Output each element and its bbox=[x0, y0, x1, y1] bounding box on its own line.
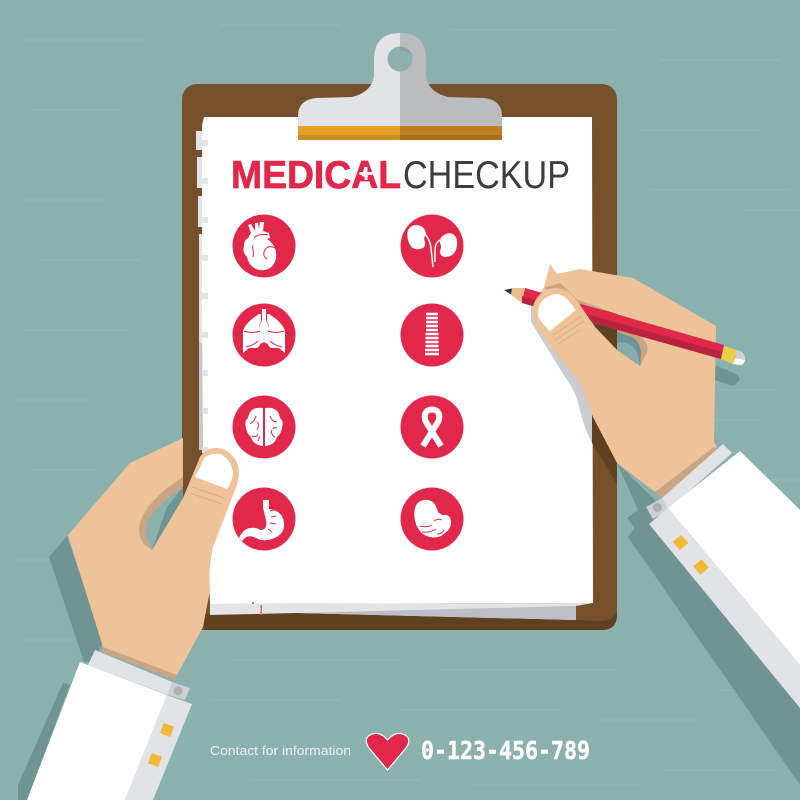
contact label: Contact for information bbox=[210, 743, 351, 758]
icon: heart organ bbox=[232, 214, 296, 278]
icon: stomach bbox=[232, 488, 296, 550]
left sleeve bbox=[27, 650, 192, 800]
finger gap bbox=[544, 283, 648, 366]
shadow: right arm bbox=[617, 463, 800, 785]
thumb nail bbox=[538, 294, 576, 331]
thumb nail bbox=[195, 454, 233, 489]
thumb bbox=[532, 288, 640, 410]
title: MEDICAL bbox=[231, 154, 401, 197]
icon: ribbon bbox=[400, 396, 464, 458]
icon: lungs bbox=[232, 304, 296, 366]
icon: kidneys bbox=[400, 214, 464, 278]
shadow: right hand on board bbox=[592, 413, 617, 484]
clipboard board bbox=[182, 84, 617, 630]
phone number: 0-123-456-789 bbox=[421, 736, 590, 765]
pencil bbox=[504, 288, 745, 365]
shadow: right hand on paper bbox=[531, 305, 617, 480]
icon: embryo bbox=[400, 488, 464, 550]
left hand bbox=[68, 438, 239, 680]
icon: heart bbox=[366, 733, 409, 770]
right hand bbox=[504, 264, 745, 498]
clip bbox=[298, 33, 502, 140]
right sleeve bbox=[646, 444, 800, 708]
shadow: left arm bbox=[18, 536, 103, 800]
title: CHECKUP bbox=[403, 154, 570, 197]
shadow: pencil bbox=[715, 365, 739, 386]
paper sheet bbox=[196, 117, 593, 620]
title bbox=[231, 154, 570, 197]
icon: spine bbox=[400, 304, 464, 366]
icon: brain bbox=[232, 396, 296, 458]
